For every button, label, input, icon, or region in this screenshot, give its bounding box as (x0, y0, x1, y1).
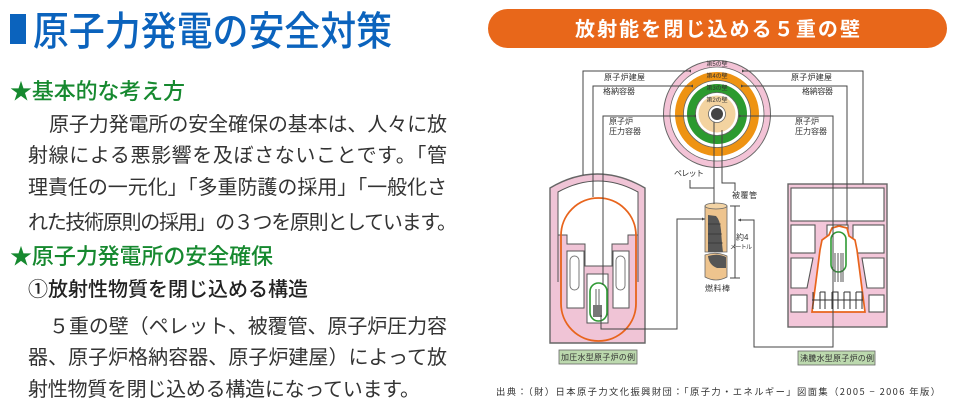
label: BWR example (798, 351, 875, 365)
labels: 約4 (736, 232, 749, 242)
header pill: 放射能を閉じ込める５重の壁 (575, 13, 860, 42)
text block: five walls: 器、原子炉格納容器、原子炉建屋）によって放 (28, 341, 447, 370)
fuel rod (705, 203, 727, 280)
labels: 原子炉建屋 (604, 72, 645, 82)
five concentric walls: 第2の壁 (706, 96, 728, 104)
labels: 被覆管 (732, 190, 757, 200)
panel: safety text (10, 74, 457, 402)
labels: 格納容器 (603, 86, 635, 96)
label: PWR example (559, 350, 637, 364)
PWR reactor (550, 174, 645, 343)
text block: five walls: 射性物質を閉じ込める構造になっています。 (28, 373, 420, 402)
BWR reactor (788, 184, 887, 327)
label: PWR example: 加圧水型原子炉の例 (561, 352, 635, 362)
labels: ペレット (674, 169, 704, 178)
source note: 出典：（財）日本原子力文化振興財団：「原子力・エネルギー」図面集（2005 − 2006 年版） (496, 384, 940, 398)
five concentric walls: 第3の壁 (706, 84, 728, 92)
labels: 圧力容器 (795, 126, 827, 136)
header pill (488, 9, 947, 48)
text block: basic approach: れた技術原則の採用」の３つを原則としています。 (28, 206, 457, 235)
heading: plant safety: ★原子力発電所の安全確保 (10, 239, 273, 271)
labels: 原子炉建屋 (791, 72, 832, 82)
text block: basic approach: 射線による悪影響を及ぼさないことです。「管 (28, 139, 447, 168)
diagram: five walls (550, 60, 887, 365)
label: BWR example: 沸騰水型原子炉の例 (800, 353, 874, 363)
labels: メートル (730, 245, 752, 251)
leader lines (583, 70, 863, 347)
five concentric walls: 第5の壁 (706, 60, 728, 68)
text block: five walls: ５重の壁（ペレット、被覆管、原子炉圧力容 (49, 310, 447, 339)
five concentric walls (664, 60, 770, 168)
labels: 圧力容器 (609, 126, 641, 136)
labels: 燃料棒 (705, 283, 730, 293)
labels: 格納容器 (802, 86, 833, 96)
labels: 原子炉 (609, 117, 633, 126)
labels (603, 72, 833, 293)
subheading: containment structure: ①放射性物質を閉じ込める構造 (28, 273, 308, 302)
text block: basic approach (28, 108, 457, 235)
labels: 原子炉 (795, 117, 819, 126)
title: 原子力発電の安全対策 (33, 0, 392, 57)
heading: basic approach: ★基本的な考え方 (10, 74, 185, 106)
five concentric walls: 第4の壁 (706, 72, 728, 80)
text block: five walls (28, 310, 447, 402)
text block: basic approach: 原子力発電所の安全確保の基本は、人々に放 (49, 108, 447, 137)
text block: basic approach: 理責任の一元化」「多重防護の採用」「一般化さ (28, 171, 447, 200)
